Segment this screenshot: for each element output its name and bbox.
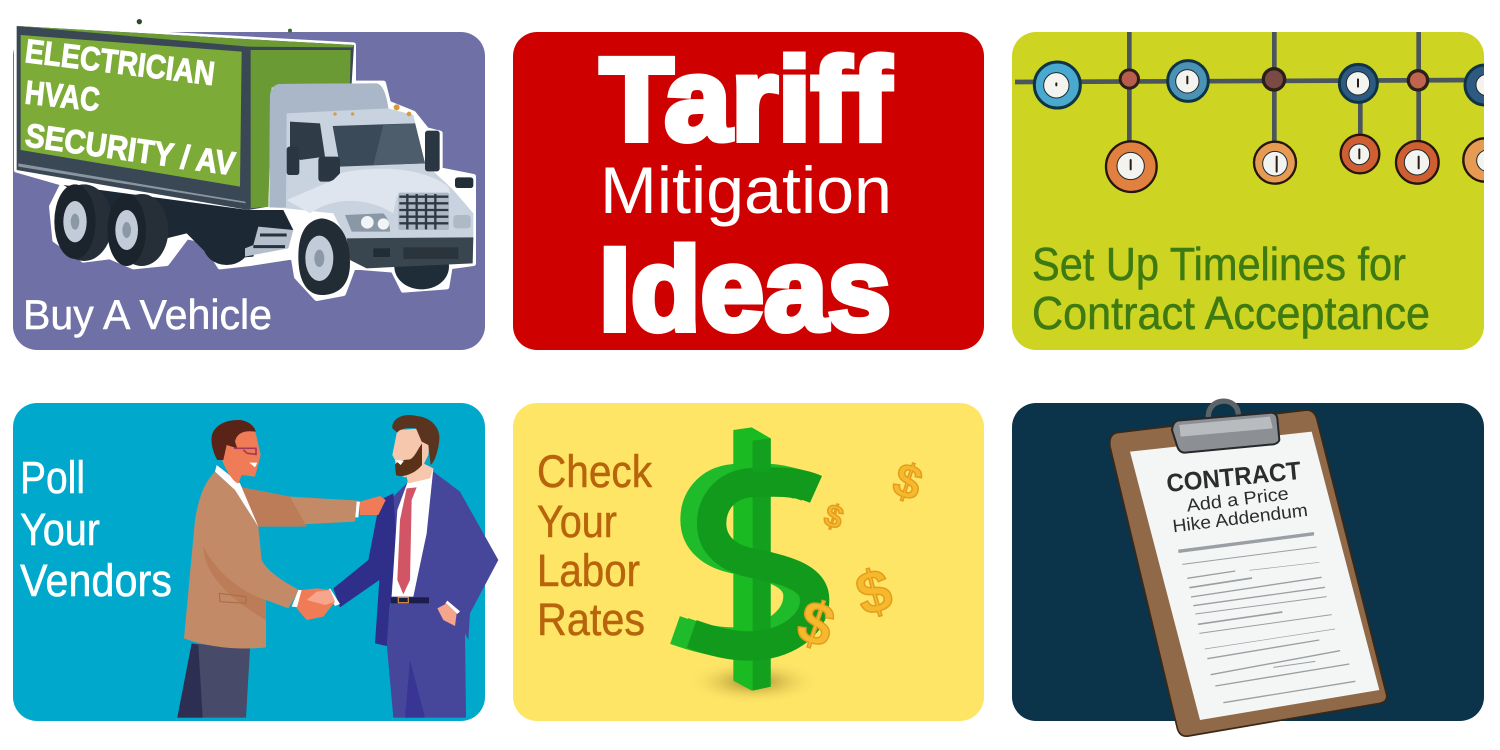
contract text bbox=[1165, 457, 1309, 536]
contract text: Add a Price bbox=[1185, 483, 1290, 516]
truck side text bbox=[23, 33, 237, 183]
label: Buy A Vehicle bbox=[23, 291, 272, 338]
title text: Tariff bbox=[600, 34, 892, 166]
panel: title bbox=[513, 32, 984, 356]
label: Poll bbox=[20, 452, 85, 503]
small dollar coins: $ bbox=[790, 587, 842, 661]
small dollar coins: $ bbox=[820, 496, 848, 536]
truck side text: ELECTRICIAN bbox=[23, 33, 217, 93]
panel: set up timelines bbox=[1012, 32, 1500, 350]
title text: Mitigation bbox=[600, 153, 892, 227]
illustration: dollar sign bbox=[675, 427, 822, 704]
label: Rates bbox=[537, 594, 645, 645]
label bbox=[537, 446, 652, 645]
label: Check bbox=[537, 446, 652, 497]
label: Labor bbox=[537, 545, 640, 596]
truck chassis bbox=[63, 185, 449, 289]
truck wheels bbox=[54, 184, 350, 295]
illustration: handshake bbox=[177, 415, 498, 718]
panel: poll your vendors bbox=[13, 403, 498, 721]
illustration: clipboard bbox=[1110, 401, 1387, 736]
truck side text: HVAC bbox=[23, 74, 102, 119]
panel: buy a vehicle bbox=[13, 19, 485, 350]
panel: check your labor rates bbox=[513, 403, 984, 721]
contract text: Hike Addendum bbox=[1171, 500, 1309, 536]
title text bbox=[599, 34, 892, 356]
panel: contract bbox=[1012, 401, 1484, 736]
label: Your bbox=[537, 496, 617, 547]
label bbox=[20, 452, 172, 606]
title text: Ideas bbox=[599, 224, 891, 356]
small dollar coins: $ bbox=[849, 555, 899, 629]
truck cab bbox=[137, 19, 473, 268]
label: Your bbox=[20, 504, 100, 555]
contract text: CONTRACT bbox=[1165, 457, 1303, 498]
small dollar coins bbox=[790, 453, 929, 661]
label bbox=[1032, 238, 1430, 339]
label: Set Up Timelines for bbox=[1032, 238, 1406, 290]
label: Contract Acceptance bbox=[1032, 287, 1430, 339]
truck side text: SECURITY / AV bbox=[23, 117, 237, 183]
man right bbox=[333, 415, 498, 718]
cargo box bbox=[17, 26, 354, 210]
label: Vendors bbox=[20, 555, 172, 606]
illustration: timeline of clocks bbox=[1015, 32, 1500, 192]
illustration: truck bbox=[17, 19, 473, 298]
clip bbox=[1172, 413, 1279, 453]
hands bbox=[292, 496, 386, 620]
small dollar coins: $ bbox=[887, 453, 929, 512]
man left bbox=[177, 420, 360, 718]
